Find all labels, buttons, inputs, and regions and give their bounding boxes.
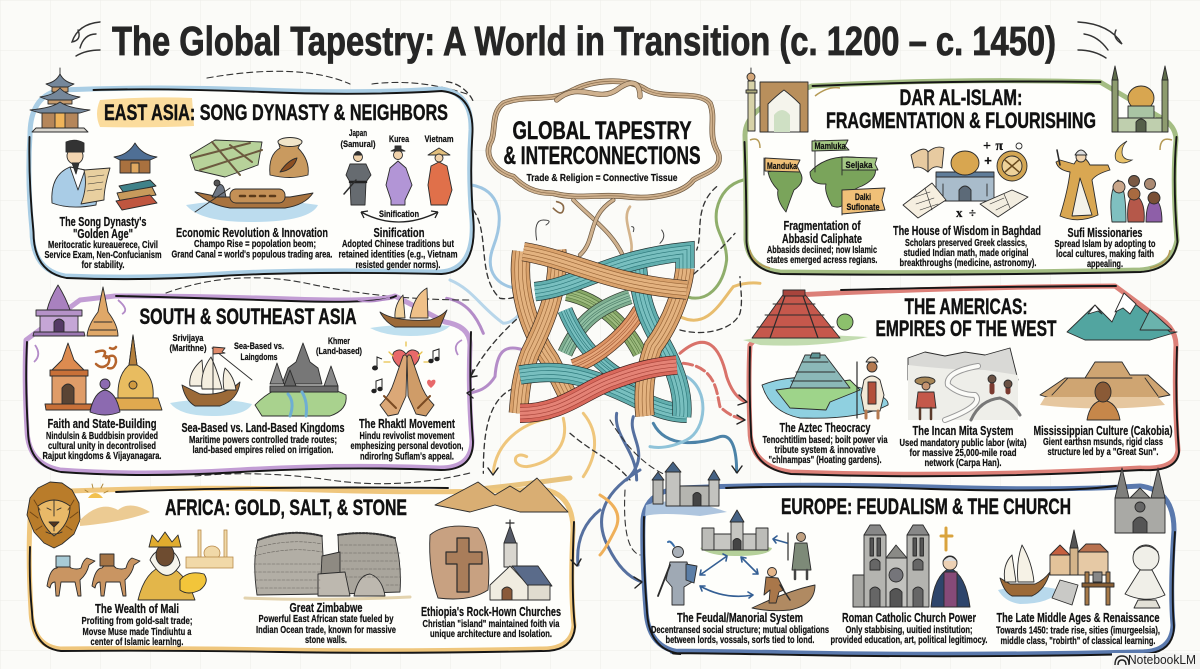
- panel: dar al-islam: [744, 66, 1178, 275]
- text: house of wisdom: The House of Wisdom in Baghdad: [893, 224, 1041, 238]
- text: economic revolution: Economic Revolution & Innovation: [176, 226, 328, 240]
- text: faith: Faith and State-Building: [48, 417, 156, 431]
- icon: top-right cathedral: [1115, 468, 1165, 533]
- text: sea-based vs land-based: Maritime powers controlled trade routes;: [189, 434, 337, 446]
- text: song dynasty golden age: for stability.: [82, 259, 125, 271]
- text: bhakti movement: The Rhaktl Movement: [359, 417, 456, 431]
- text: mali: center of Islamic learnlng.: [90, 636, 184, 648]
- text: aztec: The Aztec Theocracy: [780, 421, 871, 435]
- icon: gold cross: [941, 528, 952, 550]
- title flourish left: [72, 22, 100, 56]
- labels: flags: Dalki: [855, 192, 871, 203]
- text: economic revolution: Grand Canal = world's populous trading area.: [172, 248, 333, 260]
- text: sufi missionaries: Spread Islam by adopting to: [1054, 238, 1156, 250]
- text: sufi missionaries: [1054, 226, 1156, 270]
- text: sinification: [338, 226, 458, 271]
- icon: rice sack: [270, 138, 308, 178]
- text: feudal: Decentransed social structure; mutual obligations: [651, 624, 829, 636]
- icon: sufi missionary and crowd: [1056, 150, 1162, 222]
- icon: incan road: [908, 348, 1020, 420]
- text: mali: Profiting from gold-salt trade;: [82, 615, 192, 627]
- text: sinification: retained identities (e.g., Vietnam: [338, 248, 458, 260]
- strand: teal band k: [520, 372, 687, 413]
- text: zimbabwe: Indian Ocean trade, known for massive: [256, 624, 396, 636]
- labels: kingdoms: (Marithne): [170, 343, 206, 354]
- labels: neighbouring states: Japan: [349, 128, 367, 139]
- text: song dynasty golden age: "Golden Age": [73, 227, 133, 241]
- text: zimbabwe: stone walls.: [305, 634, 347, 646]
- labels: kingdoms: Srivijaya: [172, 333, 204, 344]
- text: inca: [900, 424, 1026, 469]
- icon: mississippian mounds: [1040, 362, 1170, 420]
- labels: kingdoms: Sea-Based vs.: [234, 341, 284, 352]
- labels: neighbouring states: Kurea: [389, 134, 410, 145]
- text: abbasid: Abbasids deciined; now Islamic: [767, 244, 877, 256]
- panel: south and southeast asia: [25, 285, 473, 475]
- text: mali: [82, 602, 192, 648]
- strand: teal band e: [637, 257, 682, 417]
- icon: minaret: [746, 68, 757, 131]
- text: inca: The Incan Mita System: [912, 424, 1014, 438]
- text: house of wisdom: breakthroughs (medicine, astronomy).: [900, 257, 1037, 269]
- text: sufi missionaries: Sufi Missionaries: [1068, 226, 1143, 240]
- text: aztec: tribute system & innovative: [774, 444, 876, 456]
- icon: mansa musa: [138, 532, 195, 600]
- labels: kingdoms: Laingdoms: [240, 352, 278, 363]
- icon: incan labourer: [915, 377, 936, 419]
- icon: printing press: [1082, 572, 1114, 605]
- heading: DAR AL-ISLAM:: [900, 85, 1022, 110]
- heading line two: FRAGMENTATION & FLOURISHING: [826, 108, 1096, 133]
- labels: flags: [767, 141, 880, 213]
- labels: kingdoms: [170, 333, 362, 363]
- text: song dynasty golden age: Service Exam, Nen-Confucianism: [44, 249, 162, 261]
- text: church: Only stabbising, uuitied institution;: [846, 624, 972, 636]
- panel: the americas: [743, 286, 1179, 476]
- text: faith: Nindulsin & Buddbisin provided: [46, 430, 158, 442]
- text: bhakti movement: emphesizing personal devotion,: [350, 440, 464, 452]
- icon: feudal castle: [700, 510, 772, 556]
- labels: neighbouring states: [340, 128, 454, 150]
- icon: gold nugget: [180, 573, 206, 593]
- text: aztec: Tenochtitlim based; boilt power via: [762, 434, 888, 446]
- text: faith: Rajput kingdoms & Vijayanagara.: [42, 450, 162, 462]
- text: church: Roman Catholic Church Power: [842, 611, 976, 625]
- text: house of wisdom: Scholars preserved Greek classics,: [905, 237, 1027, 249]
- text: song dynasty golden age: The Song Dynasty's: [60, 215, 147, 229]
- icon: ethiopian church: [490, 520, 552, 600]
- icon: stupa spire: [87, 287, 118, 336]
- text: abbasid: Fragmentation of: [784, 219, 861, 233]
- icon: mali mosque: [186, 530, 233, 568]
- icon: desert dunes: [435, 478, 568, 512]
- labels: flags: Seljaka: [846, 160, 873, 171]
- icon: purple temple: [33, 285, 85, 336]
- icon: great zimbabwe: [245, 533, 410, 599]
- icon: gold stupa: [112, 335, 162, 410]
- icon: house of wisdom: [903, 143, 1028, 218]
- text: inca: for massive 25,000-mile road: [910, 447, 1016, 459]
- panel: europe: [643, 462, 1175, 656]
- text: ethiopia: Ethiopia's Rock-Hown Churches: [421, 605, 561, 619]
- text: ethiopia: unique architecture and Isolation.: [430, 628, 552, 640]
- icon: aztec pyramid and chinampas: [762, 353, 888, 418]
- text: song dynasty golden age: Meritocratic kureauerece, Civil: [48, 239, 158, 251]
- labels: flags: Sufionate: [846, 202, 880, 213]
- text: feudal: The Feudal/Manorial System: [677, 611, 803, 625]
- text: economic revolution: Champo Rise = popolation beom;: [194, 238, 316, 250]
- text: ethiopia: Christian "island" maintained foith via: [422, 618, 560, 630]
- text: sinification: Sinification: [374, 226, 424, 240]
- labels: kingdoms: Khmer: [328, 336, 350, 347]
- labels: neighbouring states: (Samural): [340, 139, 376, 150]
- strand: teal band d: [535, 252, 685, 292]
- panel: africa: [27, 478, 575, 653]
- strand: tan band a: [520, 252, 572, 403]
- icon: bishop: [931, 556, 970, 607]
- corner ornaments: [34, 298, 462, 362]
- icon: fragmented map with flags: [764, 140, 885, 215]
- text: abbasid: Abbasid Caliphate: [782, 232, 862, 246]
- labels: kingdoms: (Land-based): [316, 346, 362, 357]
- text: economic revolution: [172, 226, 333, 260]
- math symbols: [956, 139, 1003, 220]
- strand: tan band f: [644, 268, 685, 416]
- icon: sailing ship: [170, 347, 252, 416]
- arrowheads: [467, 370, 747, 588]
- icon: vietnam figure: [428, 148, 452, 205]
- icon: renaissance ship: [998, 545, 1060, 604]
- text: mississippian: structure led by a "Great Sun".: [1048, 446, 1159, 458]
- title flourish right: [1078, 22, 1122, 58]
- heading: THE AMERICAS:: [904, 294, 1028, 319]
- icon: books: [116, 180, 157, 210]
- text: mali: The Wealth of Mali: [95, 602, 179, 616]
- icon: catholic cathedral: [853, 525, 929, 607]
- text: sufi missionaries: local cultures, making faith: [1056, 248, 1154, 260]
- icon: hilltop castle: [645, 462, 727, 516]
- icon: song scholar: [52, 140, 110, 207]
- labels: neighbouring states: Vietnam: [424, 134, 454, 145]
- text: sinification: resisted gender norms).: [356, 259, 441, 271]
- centre heading: GLOBAL TAPESTRY: [512, 117, 692, 145]
- icon: lion: [27, 482, 80, 548]
- icon: korea scholar: [386, 146, 412, 205]
- icon: praying hands and heart: [380, 342, 434, 416]
- icon: music notes and small heart: [372, 349, 439, 393]
- heading: AFRICA: GOLD, SALT, & STONE: [165, 495, 407, 520]
- heading: EAST ASIA: SONG DYNASTY & NEIGHBORS: [104, 100, 448, 125]
- centre subtitle: Trade & Religion = Connective Tissue: [526, 172, 678, 184]
- text: song dynasty golden age: [44, 215, 162, 271]
- arrow: sinification: [361, 209, 438, 222]
- math symbols: + π: [983, 139, 1003, 154]
- text: aztec: [762, 421, 888, 466]
- text: zimbabwe: Powerful East African state fueled by: [258, 613, 394, 625]
- icon: lord vassal: [788, 532, 811, 579]
- icon: rice field: [190, 140, 262, 177]
- heading line two: EMPIRES OF THE WEST: [876, 316, 1057, 341]
- text: sea-based vs land-based: land-based empires relied on irrigation.: [192, 444, 334, 456]
- heading: SOUTH & SOUTHEAST ASIA: [140, 304, 357, 329]
- icon: book: [1052, 580, 1078, 605]
- icon: academy hall: [114, 143, 157, 173]
- text: bhakti movement: Hindu revivolist movement: [360, 430, 455, 442]
- text: abbasid: [766, 219, 878, 266]
- icon: arch: [760, 82, 808, 132]
- strand: tan band c: [523, 252, 687, 290]
- icon: om symbol: [96, 347, 116, 368]
- math symbols: +: [984, 153, 992, 168]
- text: church: [830, 611, 988, 646]
- text: faith: cultural unity in decontrolised: [48, 440, 156, 452]
- text: house of wisdom: [893, 224, 1041, 269]
- icon: teal mountains: [1067, 293, 1177, 340]
- heading highlight: [97, 97, 194, 127]
- heading: EUROPE: FEUDALISM & THE CHURCH: [781, 494, 1071, 519]
- text: zimbabwe: Great Zimbabwe: [290, 601, 363, 615]
- icon: red pyramid: [743, 290, 868, 346]
- text: mississippian: [1034, 424, 1172, 458]
- text: house of wisdom: studied Indian math, made original: [904, 247, 1029, 259]
- icon: sun and dunes: [80, 484, 150, 526]
- text: mali: Movse Muse made Tindiuhtu a: [82, 626, 192, 638]
- icon: camel caravan: [47, 554, 140, 596]
- arrows: feudal relationships: [700, 536, 787, 598]
- corner ornaments: [750, 88, 1172, 268]
- icon: classical bust: [1125, 545, 1165, 608]
- centre heading line two: & INTERCONNECTIONS: [504, 142, 700, 170]
- strand: green: [567, 293, 640, 353]
- text: abbasid: states emerged acress regians.: [766, 254, 878, 266]
- icon: khmer temple: [255, 343, 346, 416]
- text: sufi missionaries: appealing.: [1087, 258, 1123, 270]
- panel: east asia: [29, 68, 474, 279]
- icon: pagoda: [30, 68, 90, 132]
- watermark: notebooklm: NotebookLM: [1128, 652, 1196, 667]
- text: ethiopia: [421, 605, 561, 640]
- text: faith: [42, 417, 162, 462]
- icon: renaissance town: [1050, 530, 1108, 575]
- strand: teal diagonal: [565, 310, 640, 387]
- text: zimbabwe: [256, 601, 396, 646]
- text: aztec: "chlnampas" (Hoating gardens).: [768, 454, 882, 466]
- text: feudal: between lords, vossals, sorfs tied to lond.: [666, 634, 815, 646]
- text: sea-based vs land-based: [182, 421, 345, 456]
- math symbols: x ÷: [956, 205, 976, 220]
- connectors outside centre: [166, 71, 680, 582]
- strand: green-teal: [565, 297, 630, 353]
- text: inca: Used mandatory public labor (wita): [900, 437, 1026, 449]
- icon: grand canal boat: [186, 180, 318, 222]
- text: renaissance: [996, 611, 1160, 647]
- strand: red band: [520, 365, 677, 413]
- icon: rock-hewn cross: [430, 526, 489, 599]
- text: sinification: Adopted Chinese traditions but: [342, 238, 454, 250]
- icon: knight: [658, 542, 697, 605]
- icon: serf: [752, 568, 815, 611]
- arrow: sinification: Sinification: [379, 209, 419, 220]
- labels: flags: Manduka: [767, 161, 798, 172]
- text: bhakti movement: [350, 417, 464, 462]
- labels: flags: Mamluka: [814, 141, 846, 152]
- text: bhakti movement: ndirorlng Suflam's appeal.: [360, 450, 454, 462]
- text: church: provided education, art, political legitimocy.: [830, 634, 988, 646]
- central frame: global tapestry: [488, 81, 719, 257]
- connectors: trade and religion threads: [447, 82, 760, 480]
- strand: tan band b: [518, 250, 557, 413]
- icon: mosque: [1112, 66, 1168, 132]
- icon: aztec warrior: [857, 357, 884, 418]
- icon: crescent moon: [1115, 141, 1132, 163]
- text: sea-based vs land-based: Sea-Based vs. Land-Based Kingdoms: [182, 421, 345, 435]
- text: inca: network (Carpa Han).: [924, 457, 1002, 469]
- strand: orange: [573, 310, 640, 367]
- icon: japan samurai: [344, 152, 371, 205]
- icon: purple buddha: [90, 379, 120, 415]
- woven knot: [518, 250, 687, 417]
- icon: orange temple: [45, 343, 92, 410]
- icon: top-right boat: [370, 288, 450, 336]
- text: feudal: [651, 611, 829, 646]
